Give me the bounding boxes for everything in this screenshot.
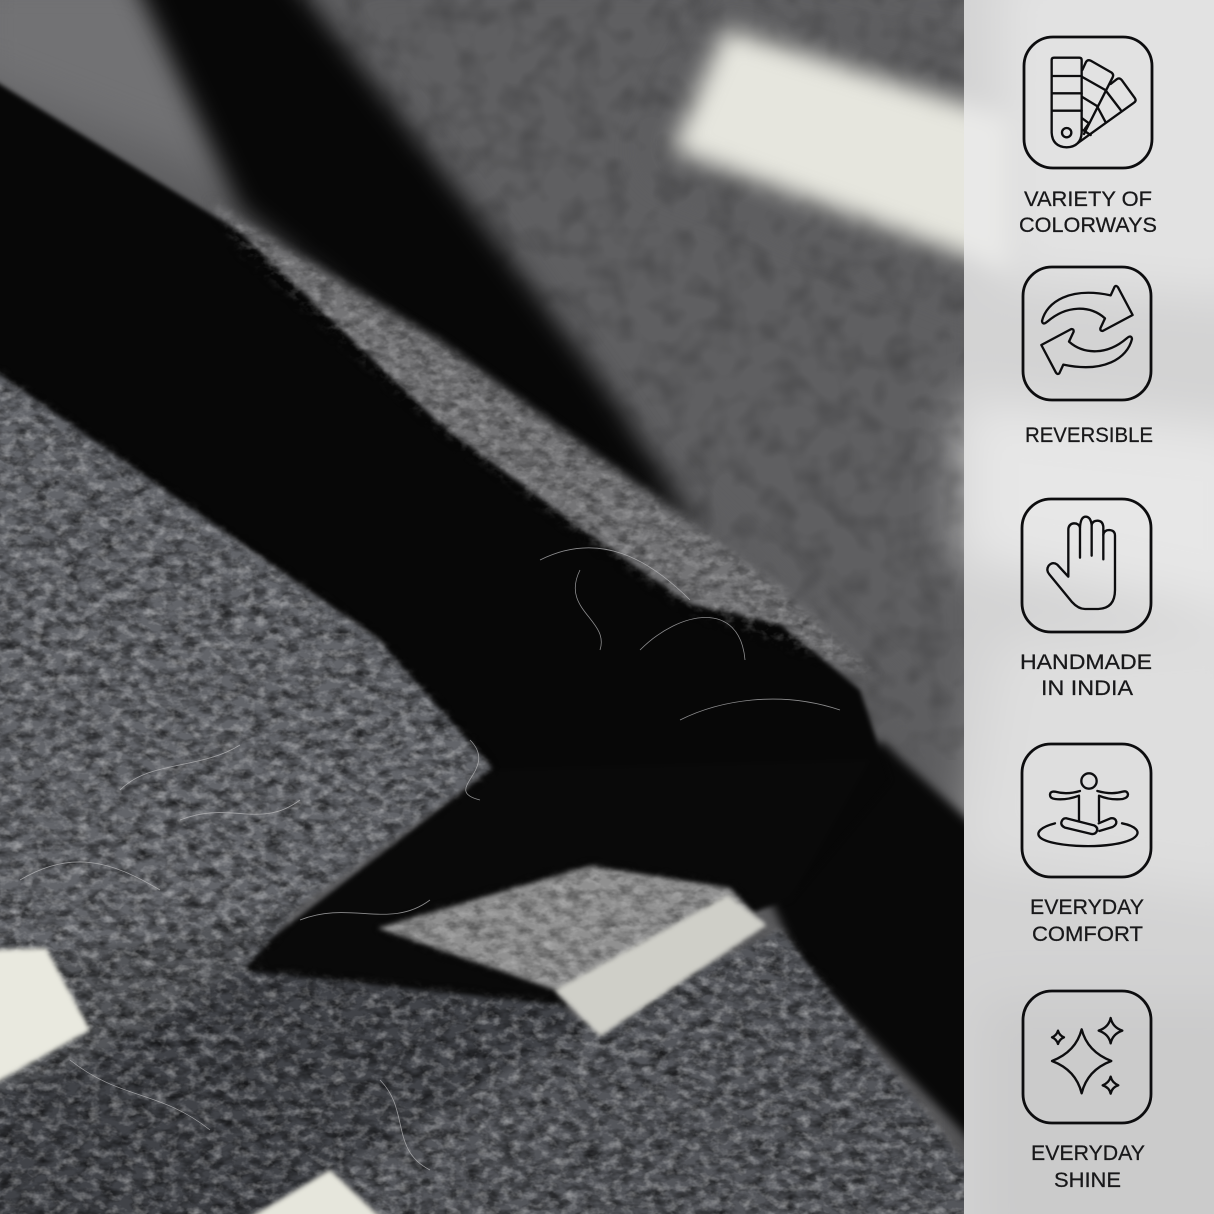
label: VARIETY OF — [1024, 188, 1152, 211]
label line 2: IN INDIA — [1041, 677, 1133, 700]
icon: open hand — [1047, 517, 1115, 609]
icon box: reversible — [1023, 267, 1151, 400]
icon: two reversing arrows — [1041, 286, 1133, 374]
icon box: handmade — [1022, 499, 1151, 632]
panel: translucent feature column — [964, 0, 1214, 1214]
label line 2: COLORWAYS — [1019, 214, 1157, 237]
feature: variety of colorways — [1019, 37, 1157, 237]
icon: meditating figure — [1038, 773, 1138, 846]
woven fibre texture — [0, 208, 964, 1214]
icon: colour swatch fan — [1052, 58, 1136, 147]
icon box: shine — [1023, 991, 1151, 1123]
label: EVERYDAY — [1031, 1142, 1145, 1165]
cream pattern blocks — [0, 895, 766, 1214]
label: EVERYDAY — [1030, 896, 1144, 919]
label: REVERSIBLE — [1025, 424, 1153, 447]
feature: reversible — [1023, 267, 1153, 447]
label line 2: COMFORT — [1032, 923, 1143, 946]
icon: sparkles — [1052, 1018, 1122, 1094]
feature: everyday shine — [1023, 991, 1151, 1192]
label line 2: SHINE — [1054, 1169, 1121, 1192]
icon box: colorways — [1024, 37, 1152, 168]
loose fibres — [20, 548, 840, 1170]
icon box: comfort — [1022, 744, 1151, 877]
soft tonal variation on blurred background — [300, 0, 964, 760]
label: HANDMADE — [1020, 651, 1152, 674]
feature: handmade in india — [1020, 499, 1152, 700]
feature: everyday comfort — [1022, 744, 1151, 946]
